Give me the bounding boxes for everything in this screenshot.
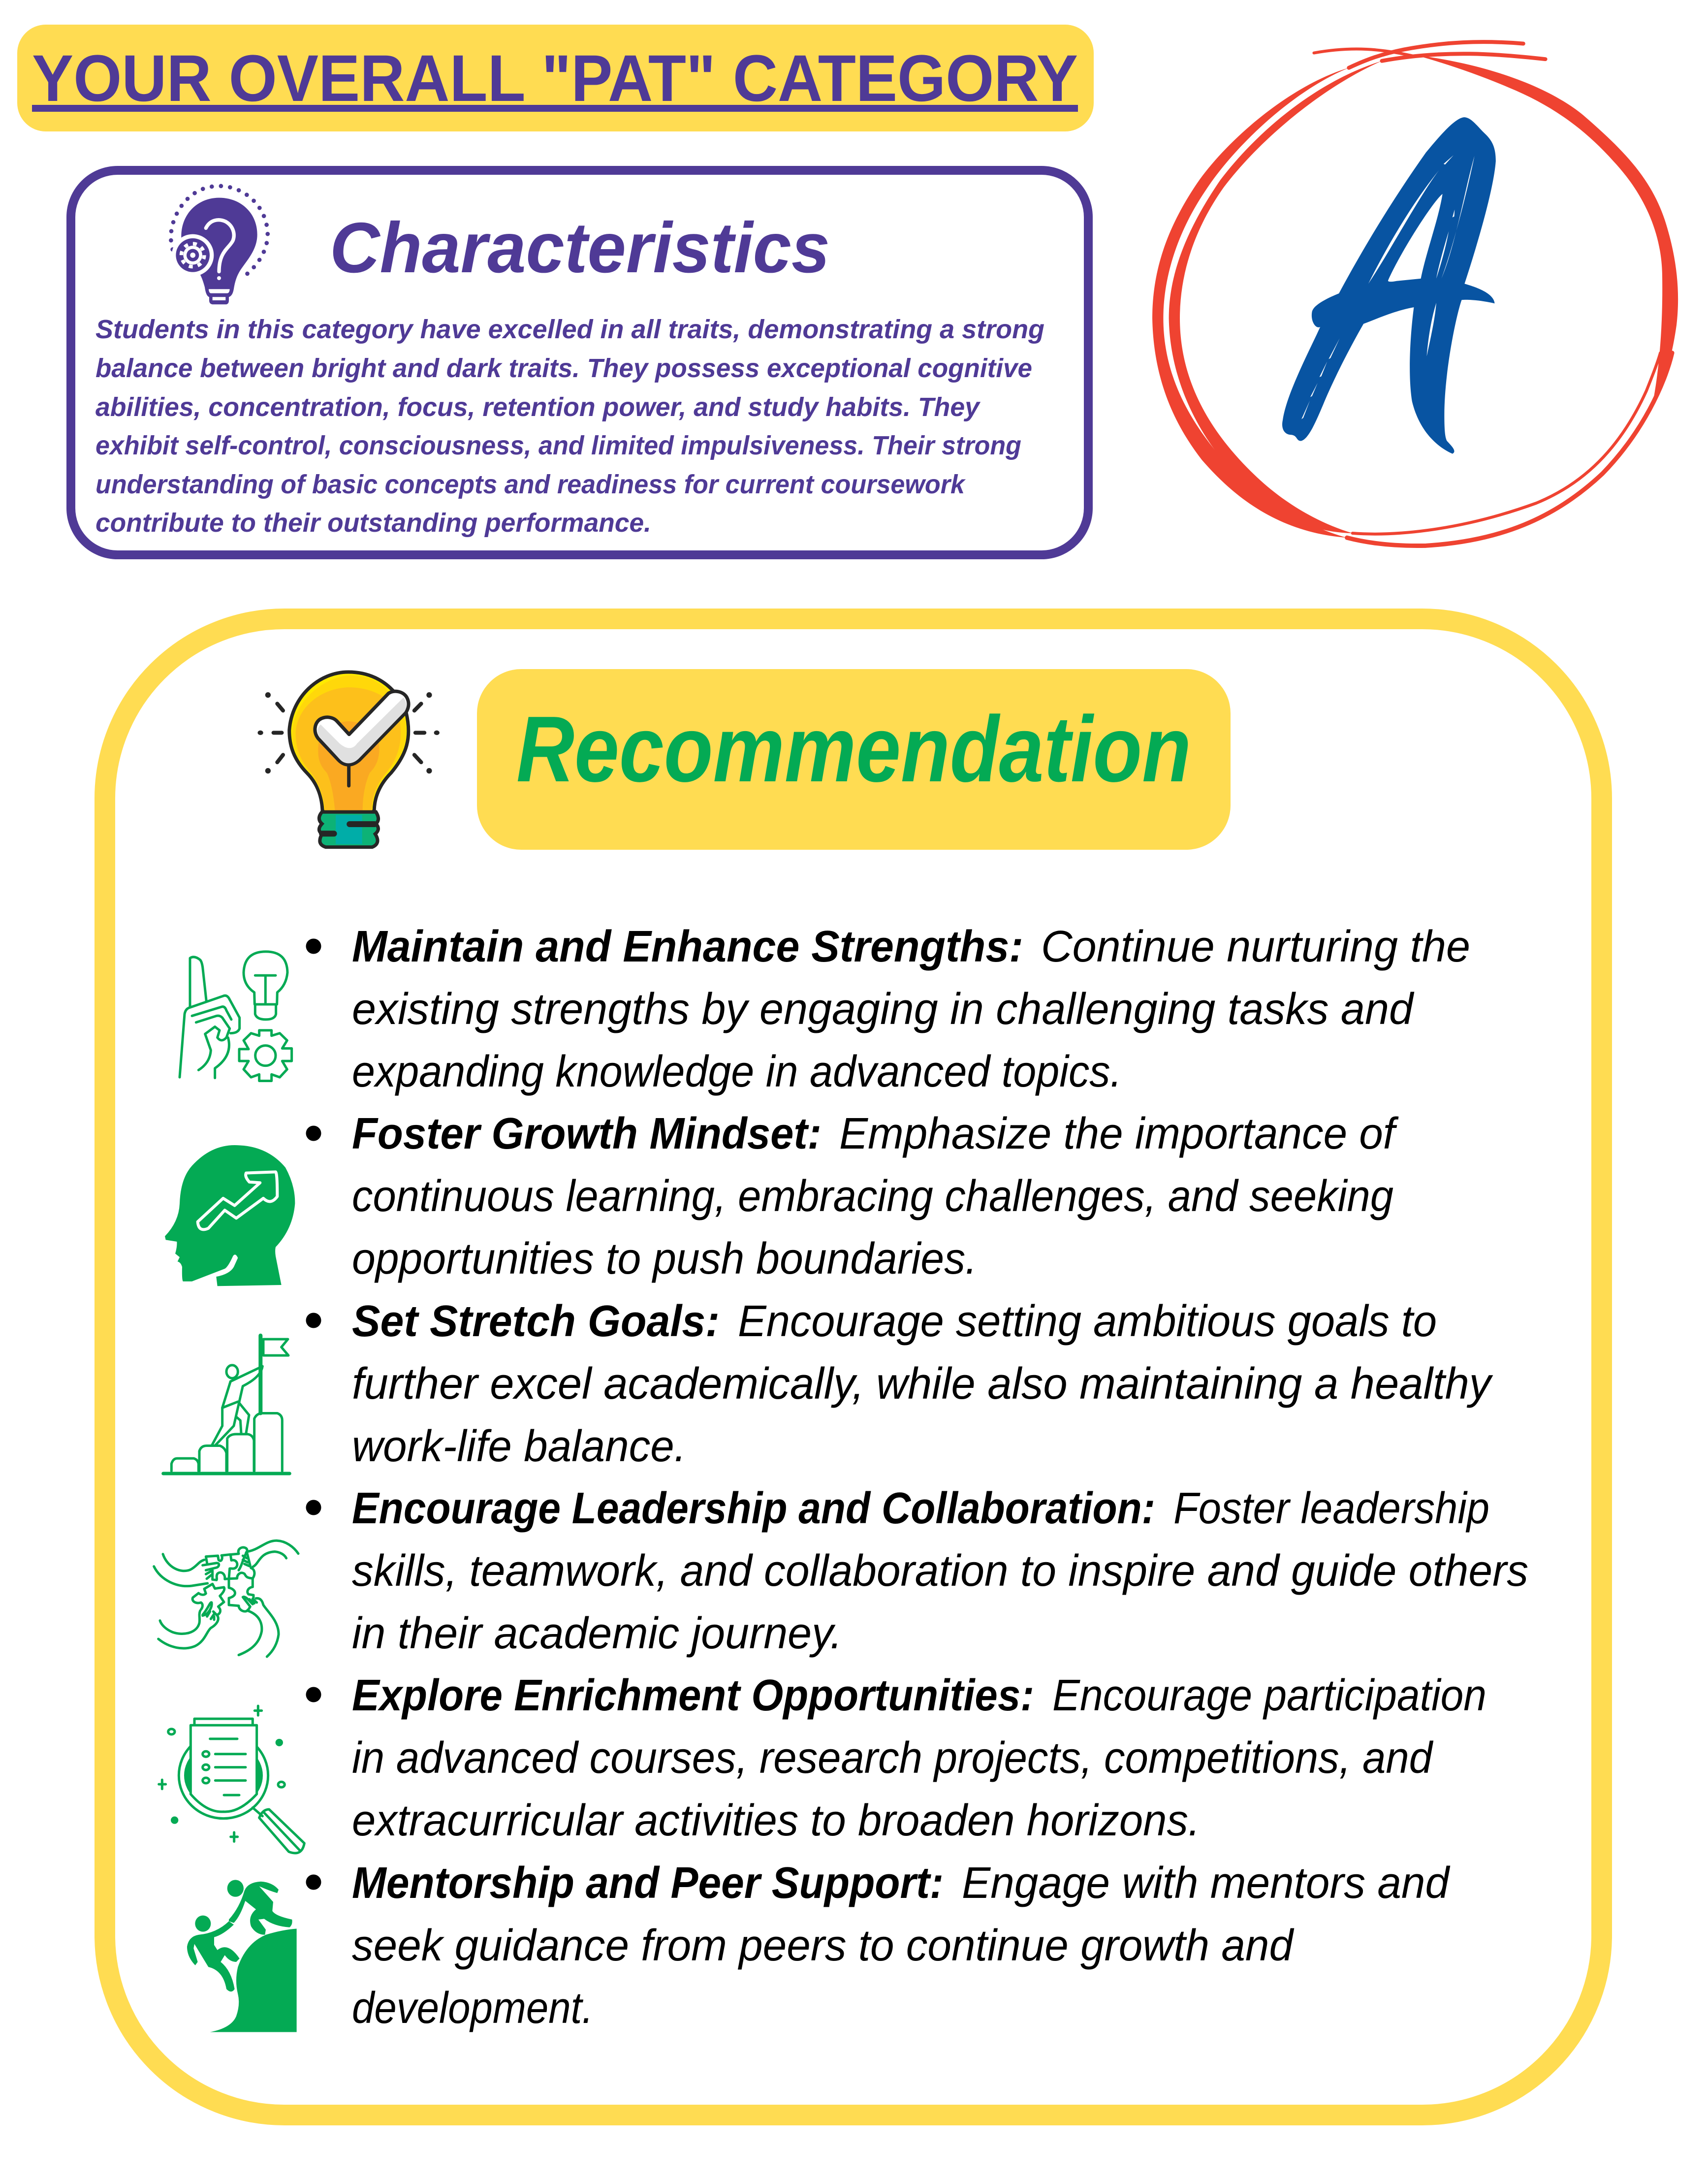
item: explore enrichment opportunities: in advanced courses, research projects, competitions, and	[352, 1733, 1434, 1783]
light rays	[274, 704, 424, 762]
item: explore enrichment opportunities: Explore Enrichment Opportunities:	[352, 1671, 1034, 1720]
icon: hand, bulb and gear	[180, 952, 292, 1081]
item: maintain and enhance strengths	[306, 922, 1470, 1096]
icon: light bulb with check mark	[257, 672, 440, 847]
title banner	[17, 25, 1094, 131]
title text: YOUR OVERALL "PAT" CATEGORY	[32, 42, 1078, 115]
item: encourage leadership and collaboration: Encourage Leadership and Collaboration:	[352, 1484, 1155, 1533]
icon: question mark bulb	[171, 186, 268, 304]
item: foster growth mindset: Emphasize the importance of	[839, 1109, 1399, 1158]
item: maintain and enhance strengths: expanding knowledge in advanced topics.	[352, 1047, 1122, 1096]
item: set stretch goals: further excel academically, while also maintaining a healthy	[352, 1359, 1493, 1409]
icon: climbers helping on a cliff	[187, 1880, 297, 2032]
letter A	[1282, 117, 1496, 454]
item: set stretch goals: Set Stretch Goals:	[352, 1297, 720, 1346]
item: mentorship and peer support: seek guidance from peers to continue growth and	[352, 1921, 1295, 1970]
icon: climbing steps to flag	[163, 1336, 289, 1474]
item: explore enrichment opportunities: Encourage participation	[1052, 1671, 1487, 1720]
icon: head with growth arrow	[165, 1145, 295, 1286]
recommendation list	[306, 922, 1528, 2033]
item: foster growth mindset: opportunities to push boundaries.	[352, 1234, 977, 1283]
hand-drawn red circle	[1152, 42, 1678, 546]
characteristics paragraph: exhibit self-control, consciousness, and limited impulsiveness. Their strong	[95, 431, 1021, 460]
item: set stretch goals	[306, 1297, 1493, 1471]
panel: characteristics	[71, 170, 1088, 555]
item: set stretch goals: Encourage setting ambitious goals to	[738, 1297, 1437, 1346]
panel: recommendation	[105, 619, 1602, 2115]
item: explore enrichment opportunities: extracurricular activities to broaden horizons.	[352, 1796, 1200, 1845]
item: mentorship and peer support: Engage with mentors and	[962, 1859, 1451, 1908]
item: mentorship and peer support: development.	[352, 1984, 593, 2033]
heading: characteristics: Characteristics	[330, 208, 830, 288]
item: mentorship and peer support: Mentorship and Peer Support:	[352, 1859, 944, 1908]
characteristics paragraph: balance between bright and dark traits. They possess exceptional cognitive	[95, 353, 1032, 383]
item: maintain and enhance strengths: Continue nurturing the	[1041, 922, 1470, 971]
item: maintain and enhance strengths: existing strengths by engaging in challenging tasks and	[352, 985, 1415, 1034]
characteristics paragraph	[95, 315, 1044, 538]
item: foster growth mindset	[306, 1109, 1399, 1283]
item: explore enrichment opportunities	[306, 1671, 1487, 1845]
item: mentorship and peer support	[306, 1859, 1451, 2033]
grade badge: letter A in red circle	[1152, 42, 1678, 546]
icon: magnifier over checklist	[159, 1706, 304, 1853]
heading: recommendation: Recommendation	[516, 697, 1191, 802]
item: encourage leadership and collaboration: Foster leadership	[1173, 1484, 1489, 1533]
item: foster growth mindset: continuous learning, embracing challenges, and seeking	[352, 1172, 1393, 1221]
characteristics paragraph: understanding of basic concepts and readiness for current coursework	[95, 470, 966, 499]
characteristics paragraph: contribute to their outstanding performance.	[95, 508, 651, 538]
item: encourage leadership and collaboration: in their academic journey.	[352, 1609, 842, 1658]
characteristics paragraph: Students in this category have excelled in all traits, demonstrating a strong	[95, 315, 1044, 344]
icon: hands joining puzzle	[154, 1540, 298, 1657]
item: foster growth mindset: Foster Growth Mindset:	[352, 1109, 822, 1158]
characteristics paragraph: abilities, concentration, focus, retention power, and study habits. They	[95, 392, 981, 422]
item: encourage leadership and collaboration: skills, teamwork, and collaboration to inspire and guide others	[352, 1546, 1528, 1596]
item: maintain and enhance strengths: Maintain and Enhance Strengths:	[352, 922, 1023, 971]
heading: recommendation	[477, 669, 1231, 850]
item: set stretch goals: work-life balance.	[352, 1422, 686, 1471]
item: encourage leadership and collaboration	[306, 1484, 1528, 1658]
